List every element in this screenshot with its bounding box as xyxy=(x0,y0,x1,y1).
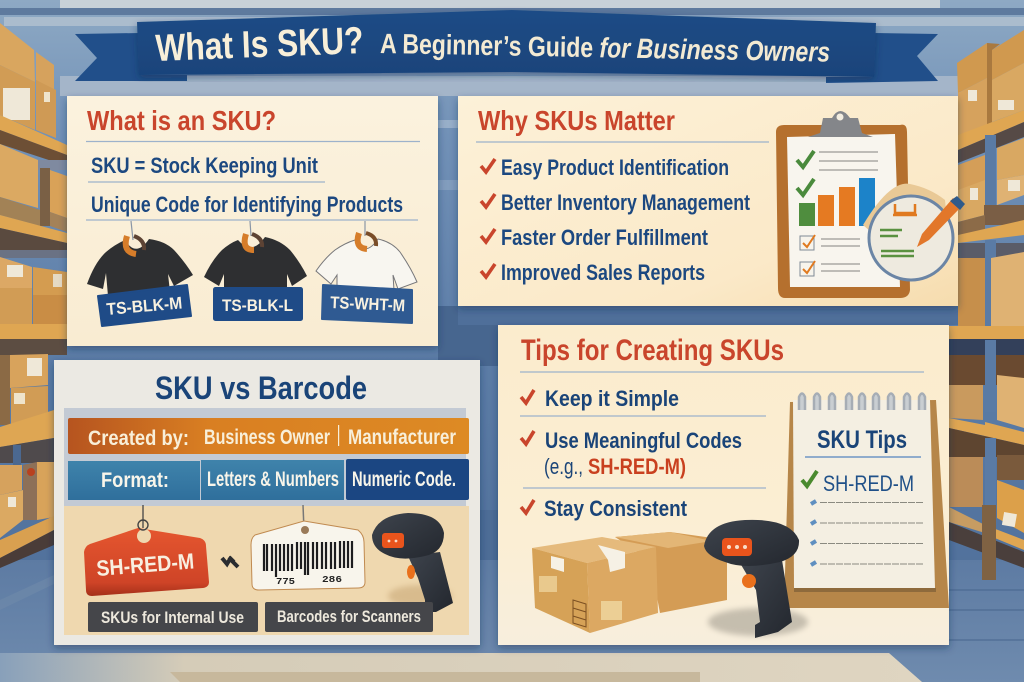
notepad code: SH-RED-M xyxy=(823,471,914,496)
heading: Tips for Creating SKUs xyxy=(521,334,784,367)
SKU tag: TS-BLK-M xyxy=(106,293,183,319)
definition: SKU = Stock Keeping Unit xyxy=(91,153,319,178)
row: format: Numeric Code. xyxy=(352,468,456,491)
benefit: reports: Improved Sales Reports xyxy=(501,260,705,285)
description: Unique Code for Identifying Products xyxy=(91,192,403,217)
tip: meaningful codes xyxy=(521,428,742,479)
icon: scanner xyxy=(372,513,453,612)
heading: Why SKUs Matter xyxy=(478,105,675,136)
barcode tag: 286 xyxy=(322,574,342,585)
subtitle text: A Beginner’s Guide for Business Owners xyxy=(380,28,830,68)
benefit: fulfillment: Faster Order Fulfillment xyxy=(501,225,709,250)
icon: cardboard boxes xyxy=(532,532,727,633)
magnifier and pencil xyxy=(863,184,965,280)
notepad title: SKU Tips xyxy=(817,426,907,454)
panel: SKU vs barcode xyxy=(54,360,480,645)
icon: clipboard with chart xyxy=(776,111,965,298)
shirt with tag: black medium xyxy=(87,221,193,326)
shirt with tag: white medium xyxy=(316,221,417,323)
SKU tag: TS-WHT-M xyxy=(330,293,406,315)
row: format: Letters & Numbers xyxy=(207,468,339,491)
benefit: identification: Easy Product Identification xyxy=(501,155,729,180)
icon: notepad xyxy=(784,394,949,608)
tip: meaningful codes: Use Meaningful Codes xyxy=(545,428,742,453)
row: format xyxy=(68,459,469,500)
heading: SKU vs Barcode xyxy=(155,370,367,406)
versus mark xyxy=(222,557,238,567)
tip: meaningful codes: SH-RED-M) xyxy=(588,454,686,479)
tip: meaningful codes: (e.g., xyxy=(544,454,583,479)
heading: What is an SKU? xyxy=(87,105,276,136)
label: SKUs for internal use: SKUs for Internal Use xyxy=(101,608,244,627)
barcode bars xyxy=(264,541,352,577)
title main text: What Is SKU? xyxy=(155,20,364,70)
row: created by xyxy=(68,418,469,454)
icon: barcode scanner xyxy=(704,520,808,638)
SKU red tag xyxy=(84,505,209,596)
row: format: Format: xyxy=(101,469,169,492)
panel: why SKUs matter xyxy=(458,96,965,306)
shirt with tag: black large xyxy=(204,221,307,321)
barcode tag: 775 xyxy=(276,576,295,587)
label: SKUs for internal use xyxy=(88,602,258,632)
label: barcodes for scanners: Barcodes for Scanners xyxy=(277,607,421,626)
left shelving xyxy=(0,23,67,568)
comparison area xyxy=(64,505,469,635)
title banner xyxy=(75,10,938,83)
row: created by: Created by: xyxy=(88,427,189,450)
barcode tag xyxy=(251,505,365,590)
panel: tips for creating SKUs xyxy=(498,325,949,645)
label: barcodes for scanners xyxy=(265,602,433,632)
right shelving xyxy=(949,30,1024,580)
spiral rings xyxy=(799,394,925,410)
clip xyxy=(808,111,873,137)
tip: stay consistent: Stay Consistent xyxy=(544,496,688,521)
row: created by: Manufacturer xyxy=(348,426,456,449)
bars xyxy=(799,178,875,226)
panel: what is an SKU xyxy=(67,96,438,346)
SKU red tag: SH-RED-M xyxy=(95,548,195,581)
blank list lines xyxy=(820,502,923,564)
SKU tag: TS-BLK-L xyxy=(222,296,293,315)
floor xyxy=(0,560,1024,682)
tip: keep it simple: Keep it Simple xyxy=(545,386,679,411)
benefit: inventory: Better Inventory Management xyxy=(501,190,751,215)
row: created by: Business Owner xyxy=(204,426,330,449)
